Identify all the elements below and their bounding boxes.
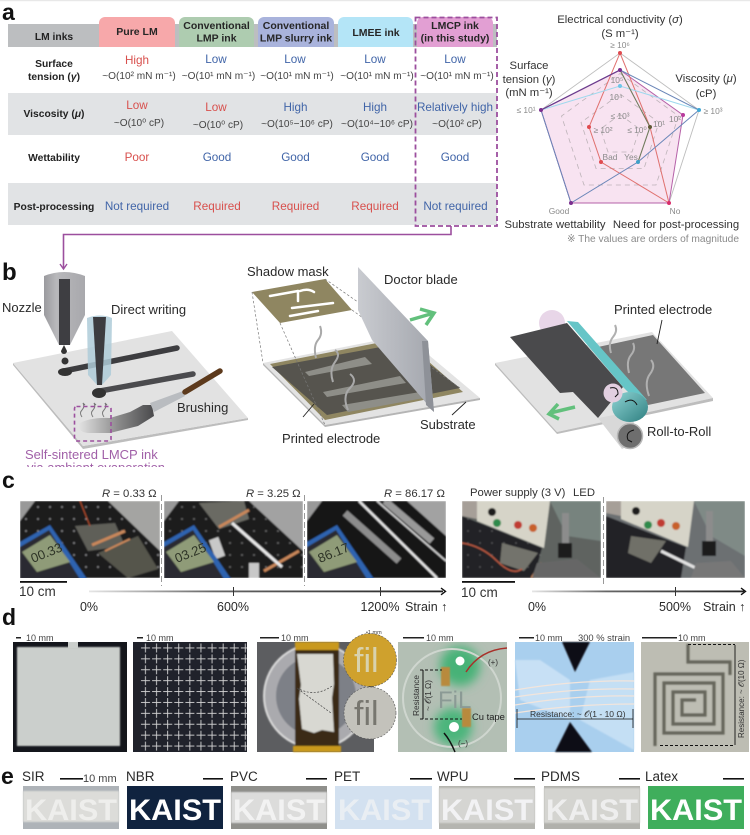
radar tick labels: 10²	[669, 114, 681, 124]
label: self-sintered ink: via ambient evaporation	[27, 460, 165, 475]
sample: Latex: Latex	[645, 769, 678, 784]
row: surface tension: Low	[284, 53, 306, 66]
sample: Latex: KAIST	[650, 794, 742, 827]
teal roller	[567, 321, 648, 422]
radar tick labels: 10⁴	[610, 92, 623, 102]
row: viscosity: ~O(10⁵−10⁶ cP)	[261, 119, 333, 130]
dashed separator	[602, 497, 604, 587]
label: substrate: Substrate	[420, 417, 476, 432]
row: post-processing: Not required	[423, 200, 488, 213]
photo: stretched lines: 10 mm	[535, 633, 563, 643]
axis: surface tension: Surface	[510, 60, 548, 72]
photo: 0% strain: 00.33	[29, 540, 64, 566]
dashed highlight	[74, 406, 111, 441]
panel a: ink comparison table	[8, 17, 497, 226]
row: surface tension: ~O(10¹ mN m⁻¹)	[182, 71, 255, 82]
axis: viscosity: ≥ 10³	[703, 106, 723, 116]
sample: SIR: 10 mm	[83, 773, 117, 785]
sample: PET: KAIST	[338, 794, 430, 827]
sample: PET: PET	[334, 769, 360, 784]
column header: Conventional LMP ink: LMP ink	[196, 32, 237, 44]
shadow mask	[252, 279, 352, 323]
photo: ink in dish with magnified insets: •1 mm	[366, 630, 382, 636]
photo: LED circuit: 10 mm	[426, 633, 454, 643]
photo: 600% strain	[164, 501, 303, 578]
vapour arrows	[315, 326, 354, 410]
sample: WPU: WPU	[437, 769, 468, 784]
dark film	[510, 323, 623, 418]
row: surface tension: Low	[364, 53, 386, 66]
radar tick labels: ≤ 10⁰	[627, 125, 647, 135]
photo: LED at 500%	[606, 501, 745, 578]
photo: cross array	[133, 633, 250, 752]
label: substrate	[420, 402, 476, 432]
label: printed electrode: Printed electrode	[614, 302, 712, 317]
photo: spiral electrode: 10 mm	[678, 633, 706, 643]
strain axis	[80, 587, 447, 614]
row: surface tension: tension (γ)	[28, 72, 80, 83]
column header: Conventional LMP slurry ink: Conventional	[263, 20, 329, 32]
photo: 0% strain	[20, 501, 160, 578]
row: wettability: Good	[361, 151, 389, 164]
panel label d: d	[2, 604, 16, 630]
row: surface tension: ~O(10¹ mN m⁻¹)	[260, 71, 334, 82]
label: power supply and LED: Power supply (3 V)	[470, 487, 566, 499]
column header: LMCP ink	[417, 17, 493, 47]
photo: LED circuit: ~ 𝒪(1 Ω)	[423, 680, 433, 711]
row shading: post-processing	[8, 183, 497, 225]
illustration: direct writing and brushing	[2, 272, 248, 475]
sample: Latex	[645, 769, 744, 829]
scale bar: 10 cm	[461, 585, 498, 600]
photo: LED circuit	[398, 633, 507, 752]
axis: substrate wettability: Substrate wettability	[504, 219, 606, 231]
strain axis: 1200%	[361, 600, 399, 614]
label: direct writing: Direct writing	[111, 302, 186, 317]
radar chart	[503, 14, 739, 245]
axis: viscosity: (cP)	[696, 88, 717, 100]
panel d: printed samples	[13, 630, 749, 752]
column header: Conventional LMP slurry ink: LMP slurry ink	[260, 32, 332, 44]
sample: SIR	[22, 769, 119, 829]
table header band	[8, 24, 497, 47]
radar tick labels: Bad	[603, 152, 618, 162]
column header: LMCP ink: (in this study)	[421, 32, 489, 44]
sample: NBR	[126, 769, 223, 829]
row: viscosity: ~O(10⁴−10⁶ cP)	[341, 119, 413, 130]
strain axis	[528, 587, 746, 614]
resistance labels: R = 3.25 Ω	[246, 488, 301, 500]
nozzle	[44, 272, 85, 354]
row: surface tension: ~O(10¹ mN m⁻¹)	[420, 71, 494, 82]
strain axis: 600%	[217, 600, 249, 614]
axis: viscosity	[675, 73, 737, 116]
photo: LED at 0%	[462, 501, 601, 578]
photo: spiral electrode	[641, 633, 749, 752]
row: viscosity: Low	[205, 101, 227, 114]
row: surface tension: High	[125, 54, 149, 67]
scale bar: 10 cm	[19, 584, 56, 599]
axis: substrate wettability: Good	[549, 206, 570, 216]
axis: surface tension	[503, 60, 556, 115]
photo: 1200% strain: 86.17	[316, 540, 351, 566]
column header: LMEE ink: LMEE ink	[352, 27, 400, 39]
illustration: doctor blade printing	[247, 264, 480, 446]
back roller	[539, 310, 565, 336]
axis: substrate wettability	[504, 206, 606, 231]
photo: ink in dish with magnified insets: fil	[354, 642, 379, 680]
green arrow	[410, 309, 434, 325]
row: viscosity: ~O(10² cP)	[432, 119, 482, 130]
row: post-processing: Required	[351, 200, 399, 213]
strain axis: Strain ↑	[405, 600, 447, 614]
radar footnote: ※ The values are orders of magnitude	[567, 234, 739, 245]
column header: Pure LM: Pure LM	[116, 26, 158, 38]
label: printed electrode: Printed electrode	[282, 431, 380, 446]
photo: ink in dish with magnified insets: 10 mm	[281, 633, 309, 643]
row: post-processing: Required	[272, 200, 319, 213]
row: surface tension: Low	[205, 53, 227, 66]
photo: ink in dish with magnified insets	[257, 630, 396, 752]
panel c: LED demonstration	[461, 487, 746, 614]
row: wettability: Good	[441, 151, 469, 164]
panel c: strain photos with multimeter	[19, 488, 447, 614]
small purple roller	[604, 384, 622, 402]
dashed separators	[162, 495, 304, 586]
lower film	[598, 412, 640, 449]
photo: stretched lines: 300 % strain	[578, 632, 630, 643]
panel label e: e	[1, 763, 14, 789]
axis: need for post-processing: Need for post-processing	[613, 219, 739, 231]
axis: viscosity: Viscosity (μ)	[675, 73, 737, 85]
label: power supply and LED: LED	[573, 487, 595, 499]
photo: LED circuit: FiL	[438, 687, 471, 714]
radar tick labels: Yes	[624, 152, 638, 162]
column header: LM inks: LM inks	[35, 32, 73, 43]
label: roll-to-roll: Roll-to-Roll	[647, 424, 711, 439]
direct writing nozzle	[87, 316, 112, 385]
axis: surface tension: ≤ 10¹	[516, 105, 536, 115]
label: printed electrode	[282, 404, 380, 446]
label: nozzle: Nozzle	[2, 300, 42, 315]
sample: PDMS: PDMS	[541, 769, 580, 784]
printed electrode area	[598, 335, 705, 405]
resistance labels	[102, 488, 445, 500]
sample: NBR: NBR	[126, 769, 155, 784]
sample: NBR: KAIST	[129, 794, 221, 827]
axis: electrical conductivity: ≥ 10⁶	[610, 40, 630, 50]
column header: Conventional LMP ink	[179, 17, 254, 47]
radar grid	[562, 74, 678, 185]
vapour arrows	[80, 403, 107, 417]
label: self-sintered ink	[25, 447, 165, 475]
row: surface tension: Surface	[35, 59, 73, 70]
photo: 600% strain: 03.25	[173, 540, 208, 566]
green arrow	[549, 404, 575, 419]
photo: cross array: 10 mm	[146, 633, 174, 643]
row: post-processing	[14, 200, 488, 213]
axis: electrical conductivity: Electrical conductivity (σ)	[557, 14, 683, 26]
sample: SIR: KAIST	[25, 794, 117, 827]
label: brushing: Brushing	[177, 400, 228, 415]
row: surface tension	[28, 53, 494, 83]
row: viscosity: High	[283, 101, 308, 114]
scale bar	[19, 581, 67, 599]
resistance labels: R = 86.17 Ω	[384, 488, 445, 500]
row: post-processing: Post-processing	[14, 202, 94, 213]
sample: PDMS: KAIST	[546, 794, 638, 827]
series: slurry	[541, 70, 699, 203]
row: wettability	[28, 151, 469, 164]
label: printed electrode	[614, 302, 712, 344]
substrate with ink	[263, 335, 480, 427]
row: surface tension: Low	[444, 53, 466, 66]
column header: Conventional LMP slurry ink	[258, 17, 334, 47]
sample: PVC	[230, 769, 327, 829]
dashed projection lines	[252, 279, 460, 425]
substrate	[495, 332, 713, 434]
doctor blade	[358, 267, 434, 412]
row: surface tension: ~O(10¹ mN m⁻¹)	[340, 71, 414, 82]
strain axis: 0%	[80, 600, 98, 614]
radar LMCP area	[541, 70, 683, 203]
row: wettability: Good	[281, 151, 310, 164]
axis: electrical conductivity	[557, 14, 683, 50]
strain axis: 500%	[659, 600, 691, 614]
strain axis: 0%	[528, 600, 546, 614]
row: viscosity: Relatively high	[417, 101, 493, 114]
axis: need for post-processing: No	[670, 206, 681, 216]
panel label c: c	[2, 467, 15, 493]
brush and ink stroke	[78, 371, 220, 433]
photo: LED circuit: Cu tape	[472, 711, 505, 722]
lower roller	[618, 424, 642, 448]
axis: surface tension: tension (γ)	[503, 74, 556, 86]
row: viscosity: ~O(10⁰ cP)	[114, 118, 164, 129]
row: wettability: Wettability	[28, 153, 80, 164]
sample: PVC: PVC	[230, 769, 258, 784]
row: viscosity: Viscosity (μ)	[24, 109, 84, 120]
column header: LMCP ink: LMCP ink	[431, 20, 479, 32]
series: LMCP highlighted edge	[541, 70, 620, 110]
photo: spiral electrode: Resistance: ~ 𝒪(10 Ω)	[737, 659, 746, 738]
column header: Conventional LMP ink: Conventional	[183, 20, 250, 32]
sample: SIR: SIR	[22, 769, 45, 784]
row: viscosity	[24, 99, 493, 131]
photo: LED circuit: (−)	[458, 739, 468, 748]
column header: Pure LM	[99, 17, 175, 47]
printed lines	[64, 348, 193, 391]
radar data points	[539, 51, 701, 205]
row: viscosity: ~O(10⁰ cP)	[193, 120, 243, 131]
series: pure LM	[589, 53, 669, 203]
photo: ink in dish with magnified insets: fil	[354, 695, 379, 733]
scale bar	[461, 581, 515, 600]
row: post-processing: Required	[193, 200, 241, 213]
sample: WPU: KAIST	[441, 794, 533, 827]
radar tick labels	[593, 75, 681, 162]
sample: PVC: KAIST	[233, 794, 325, 827]
photo: LED circuit: Resistance	[411, 675, 421, 716]
resistance labels: R = 0.33 Ω	[102, 488, 157, 500]
row: surface tension: ~O(10² mN m⁻¹)	[102, 71, 176, 82]
row: post-processing: Not required	[105, 200, 169, 213]
dashed highlight around LMCP column	[416, 18, 497, 226]
radar tick labels: 10¹	[653, 119, 665, 129]
series: LMEE	[541, 86, 699, 110]
radar tick labels: ≥ 10²	[593, 125, 613, 135]
series: LMP	[620, 70, 650, 162]
sample: PET	[334, 769, 432, 829]
sample: PDMS	[541, 769, 640, 829]
row: viscosity: High	[363, 101, 387, 114]
photo: stretched lines: Resistance: ~ 𝒪(1 - 10 Ω)	[530, 709, 626, 719]
strain axis: Strain ↑	[703, 600, 745, 614]
illustration: roll-to-roll printing	[495, 302, 713, 449]
photo: large-area film	[13, 633, 127, 752]
connector arrow from table to panel b	[60, 226, 451, 269]
radar outer pentagon	[541, 53, 699, 203]
panel label b: b	[2, 259, 17, 286]
label: self-sintered ink: Self-sintered LMCP ink	[25, 447, 158, 462]
column header: LMEE ink	[338, 17, 413, 47]
photo: large-area film: 10 mm	[26, 633, 54, 643]
row: wettability: Good	[203, 151, 231, 164]
axis: electrical conductivity: (S m⁻¹)	[601, 28, 639, 40]
label: doctor blade: Doctor blade	[384, 272, 458, 287]
photo: LED circuit: (+)	[488, 658, 498, 667]
row shading: viscosity	[8, 93, 497, 135]
photo: 1200% strain	[307, 501, 446, 578]
panel e: KAIST prints on substrates	[22, 769, 744, 829]
radar tick labels: 10⁵	[611, 75, 623, 85]
photo: stretched lines	[515, 632, 634, 752]
substrate plate	[13, 331, 248, 449]
label: shadow mask: Shadow mask	[247, 264, 329, 279]
axis: need for post-processing	[613, 206, 739, 231]
sample: WPU	[437, 769, 535, 829]
ink blobs	[58, 358, 106, 398]
axis: surface tension: (mN m⁻¹)	[505, 87, 553, 99]
row: viscosity: Low	[126, 99, 148, 112]
radar tick labels: ≤ 10³	[610, 111, 630, 121]
vapour arrows	[610, 325, 653, 396]
row: wettability: Poor	[125, 151, 149, 164]
